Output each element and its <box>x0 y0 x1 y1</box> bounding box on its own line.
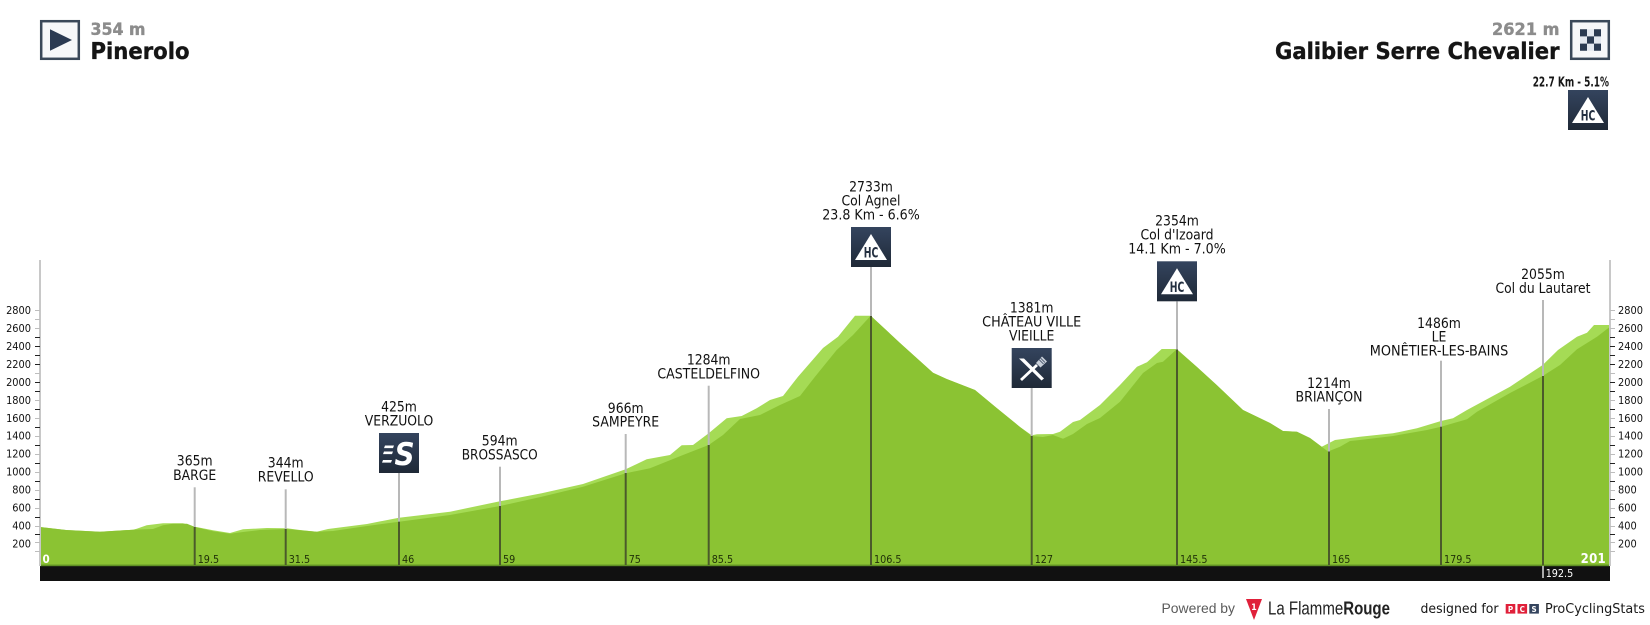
marker: Col du Lautaret <box>1496 267 1591 580</box>
logo: PCS <box>1506 604 1539 614</box>
right altitude axis: 200 <box>1618 538 1637 550</box>
right altitude axis: 1400 <box>1618 430 1643 442</box>
right altitude axis: 2800 <box>1618 304 1643 317</box>
logo: PCS: S <box>1532 605 1537 614</box>
black distance bar <box>40 566 1610 581</box>
start altitude: 354 m <box>90 20 146 40</box>
right altitude axis: 2000 <box>1618 376 1643 389</box>
logo: La Flamme Rouge: 1 <box>1251 603 1257 613</box>
right altitude axis: 600 <box>1618 502 1637 514</box>
elevation profile <box>40 316 1610 566</box>
profile: light climbing face <box>40 316 1610 566</box>
powered by text: Powered by <box>1162 601 1235 616</box>
left altitude axis: 1400 <box>6 430 31 442</box>
right altitude axis: 2400 <box>1618 340 1643 353</box>
right altitude axis <box>1610 260 1643 566</box>
logo: PCS: C <box>1520 605 1525 614</box>
marker: Le Monetier-les-Bains: 179.5 <box>1444 553 1472 566</box>
left altitude axis: 800 <box>12 484 31 496</box>
marker: Revello: REVELLO <box>258 470 314 486</box>
start town: Pinerolo <box>90 39 190 65</box>
start km label: 0 <box>42 552 50 566</box>
marker: Revello <box>258 455 314 566</box>
marker: Chateau Ville Vieille feed zone: 127 <box>1035 553 1053 566</box>
marker: Chateau Ville Vieille feed zone: VIEILLE <box>1009 329 1055 345</box>
left altitude axis: 200 <box>12 538 31 550</box>
marker: Briancon <box>1296 376 1362 566</box>
marker: Verzuolo sprint: 46 <box>402 553 414 566</box>
marker: Barge: 19.5 <box>198 553 219 566</box>
icon: HC climb Agnel <box>851 227 891 267</box>
marker: Chateau Ville Vieille feed zone: 1381m <box>1010 301 1054 317</box>
marker: Barge: BARGE <box>173 468 216 484</box>
marker: Brossasco: 594m <box>482 433 518 449</box>
marker: Sampeyre: 75 <box>629 553 641 566</box>
profile: main green terrain <box>40 316 1610 566</box>
left altitude axis: 2600 <box>6 322 31 335</box>
left altitude axis: 1600 <box>6 412 31 425</box>
marker: Briancon: BRIANÇON <box>1296 390 1362 406</box>
marker: Brossasco: BROSSASCO <box>462 448 538 464</box>
marker: Verzuolo sprint <box>365 399 433 566</box>
logo: La Flamme Rouge: La FlammeRouge <box>1268 598 1390 618</box>
right altitude axis: 400 <box>1618 520 1637 532</box>
marker: Col d'Izoard: Col d'Izoard <box>1140 228 1214 244</box>
marker: Revello: 31.5 <box>289 553 310 566</box>
finish climb length and gradient: 22.7 Km - 5.1% <box>1533 76 1609 90</box>
right altitude axis: 1800 <box>1618 394 1643 407</box>
right altitude axis: 2200 <box>1618 358 1643 371</box>
left altitude axis: 1800 <box>6 394 31 407</box>
marker: Col du Lautaret: Col du Lautaret <box>1496 281 1591 297</box>
marker: Col Agnel: Col Agnel <box>842 194 900 210</box>
marker: Col d'Izoard <box>1128 214 1226 566</box>
marker: Brossasco: 59 <box>503 553 515 566</box>
ground line <box>40 565 1610 566</box>
designed for text: designed for <box>1420 602 1499 617</box>
start header <box>41 20 190 65</box>
marker: Col Agnel: 2733m <box>849 179 893 195</box>
marker: Briancon: 165 <box>1332 553 1350 566</box>
marker: Col Agnel: 106.5 <box>874 553 902 566</box>
marker: Col Agnel <box>822 179 920 566</box>
icon: feed zone <box>1012 348 1052 388</box>
marker: Revello: 344m <box>268 455 304 471</box>
icon: HC climb Izoard: HC <box>1170 280 1184 296</box>
marker: Chateau Ville Vieille feed zone: CHÂTEAU VILLE <box>982 313 1081 331</box>
marker: Le Monetier-les-Bains <box>1370 316 1508 566</box>
marker: Barge <box>173 454 219 566</box>
marker: Sampeyre: 966m <box>608 401 644 417</box>
left altitude axis: 2200 <box>6 358 31 371</box>
marker: Chateau Ville Vieille feed zone <box>982 301 1081 566</box>
marker: Col du Lautaret: 2055m <box>1521 267 1565 283</box>
marker: Brossasco <box>462 433 538 566</box>
marker: Sampeyre <box>592 401 659 566</box>
left altitude axis: 1000 <box>6 466 31 478</box>
right altitude axis: 800 <box>1618 484 1637 496</box>
right altitude axis: 1600 <box>1618 412 1643 425</box>
marker: Verzuolo sprint: VERZUOLO <box>365 414 433 430</box>
ProCyclingStats text: ProCyclingStats <box>1545 602 1645 617</box>
marker: Sampeyre: SAMPEYRE <box>592 415 659 431</box>
finish climb info <box>1533 76 1609 130</box>
finish header <box>1275 20 1609 65</box>
icon: HC climb Agnel: HC <box>864 246 878 262</box>
marker: Col d'Izoard: 2354m <box>1155 214 1199 230</box>
icon: start flag <box>41 21 79 59</box>
logo: PCS: P <box>1508 605 1513 614</box>
right altitude axis: 1000 <box>1618 466 1643 478</box>
icon: finish flag <box>1571 21 1609 59</box>
marker: Casteldelfino: 85.5 <box>712 553 733 566</box>
left altitude axis: 400 <box>12 520 31 532</box>
left altitude axis: 2800 <box>6 304 31 317</box>
icon: HC climb Izoard <box>1157 261 1197 301</box>
marker: Le Monetier-les-Bains: LE <box>1432 330 1447 346</box>
right altitude axis: 2600 <box>1618 322 1643 335</box>
marker: Briancon: 1214m <box>1307 376 1351 392</box>
icon: HC climb finish: HC <box>1581 109 1595 125</box>
marker: Casteldelfino <box>657 353 760 566</box>
marker: Col Agnel: 23.8 Km - 6.6% <box>822 208 920 224</box>
finish altitude: 2621 m <box>1492 20 1560 40</box>
marker: Col d'Izoard: 14.1 Km - 7.0% <box>1128 241 1226 257</box>
footer credits <box>1162 598 1645 620</box>
marker: Verzuolo sprint: 425m <box>381 399 417 415</box>
icon: intermediate sprint: S <box>394 437 415 473</box>
left altitude axis <box>6 260 40 566</box>
marker: Casteldelfino: 1284m <box>687 353 731 369</box>
marker: Le Monetier-les-Bains: 1486m <box>1417 316 1461 332</box>
marker: Casteldelfino: CASTELDELFINO <box>657 367 760 383</box>
marker: Le Monetier-les-Bains: MONÊTIER-LES-BAINS <box>1370 342 1508 360</box>
right altitude axis: 1200 <box>1618 448 1643 460</box>
finish km label: 201 <box>1581 552 1606 567</box>
left altitude axis: 2400 <box>6 340 31 353</box>
marker: Col d'Izoard: 145.5 <box>1180 553 1208 566</box>
finish town: Galibier Serre Chevalier <box>1275 39 1560 65</box>
left altitude axis: 2000 <box>6 376 31 389</box>
left altitude axis: 600 <box>12 502 31 514</box>
icon: intermediate sprint <box>379 433 419 473</box>
marker: Barge: 365m <box>177 454 213 470</box>
marker: Col du Lautaret: 192.5 <box>1546 567 1573 580</box>
left altitude axis: 1200 <box>6 448 31 460</box>
